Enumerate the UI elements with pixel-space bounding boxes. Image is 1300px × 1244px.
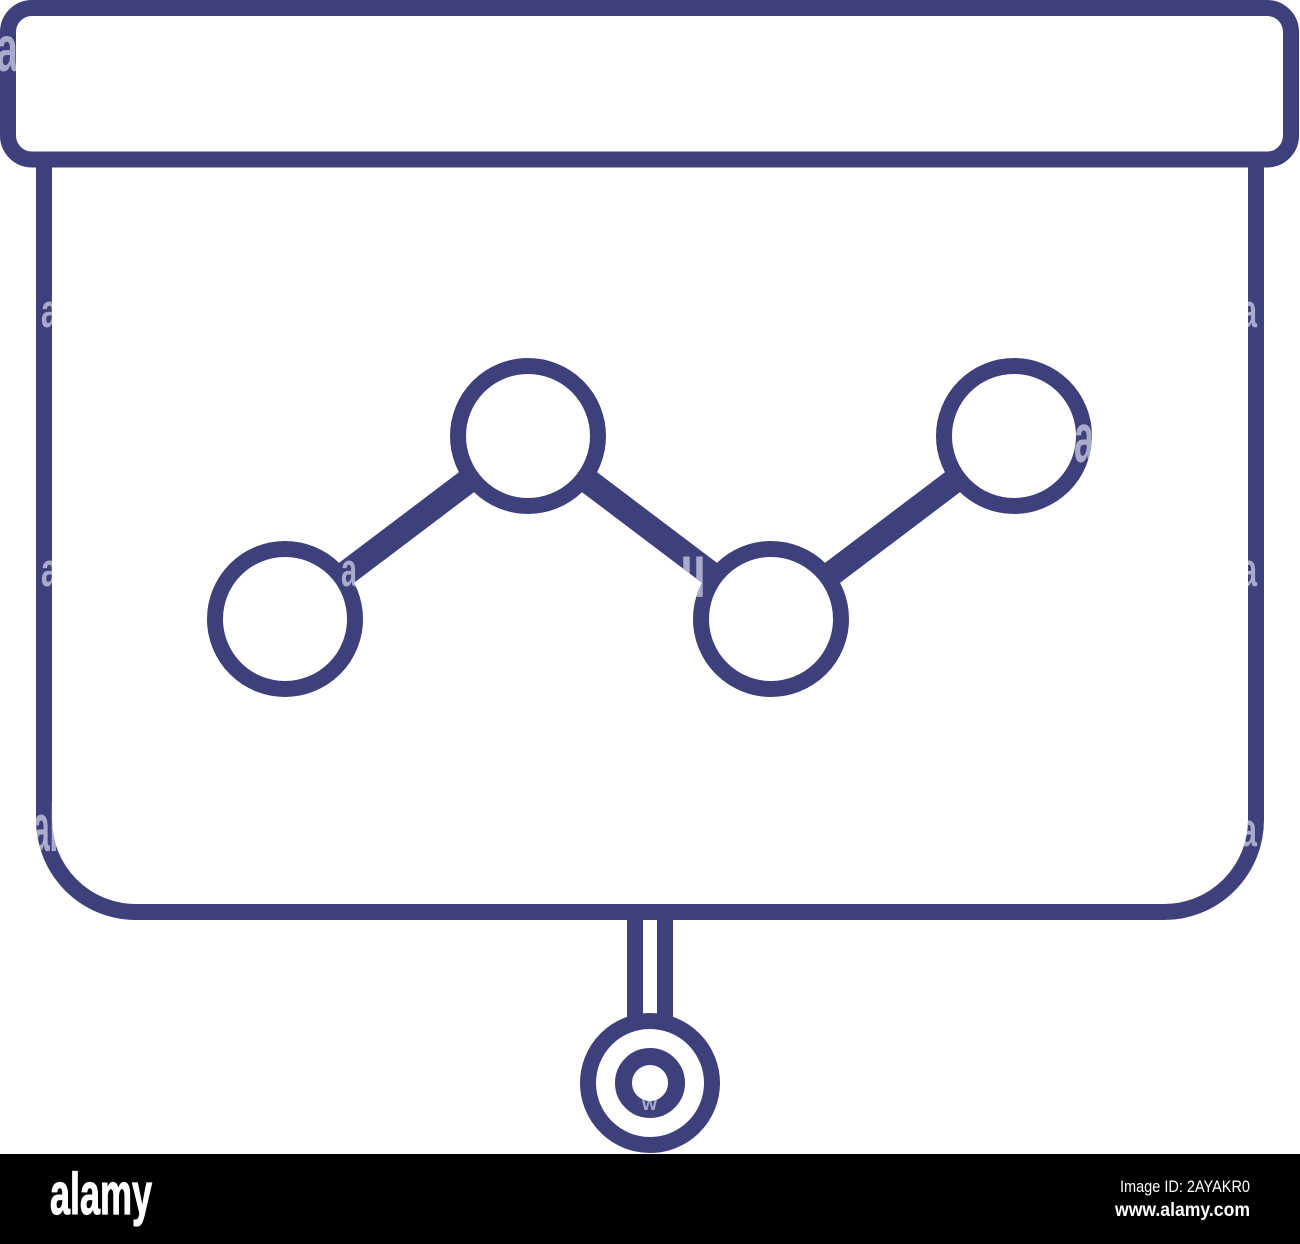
watermark fragments: w [641,1094,658,1114]
watermark fragments: a [341,543,358,596]
watermark fragments: a [1241,543,1258,596]
alamy logo: alamy [50,1162,152,1227]
pull handle outer ring [588,1021,712,1145]
chart connector 1 [341,478,472,577]
chart connector 2 [584,478,715,577]
image id: Image ID: 2AYAKR0 [1120,1177,1250,1196]
watermark fragments: al [33,790,58,866]
chart point 1 [215,549,355,689]
screen housing [8,8,1291,160]
watermark fragments: a [41,284,59,337]
screen panel [44,160,1256,912]
pull handle inner ring [624,1056,676,1110]
line chart [215,366,1084,689]
chart connector 3 [827,478,958,577]
chart point 4 [944,366,1084,506]
watermark fragments: a [1241,284,1258,337]
pull cord [635,918,665,1022]
footer background [0,1154,1300,1244]
watermark fragments: a [1074,399,1095,477]
watermark fragments: a [41,543,59,596]
website: www.alamy.com [1114,1200,1250,1221]
watermark fragments: ll [680,546,706,609]
footer bar [0,1154,1300,1244]
chart point 2 [458,366,598,506]
watermark fragments: a [1240,803,1258,856]
chart point 3 [701,549,841,689]
